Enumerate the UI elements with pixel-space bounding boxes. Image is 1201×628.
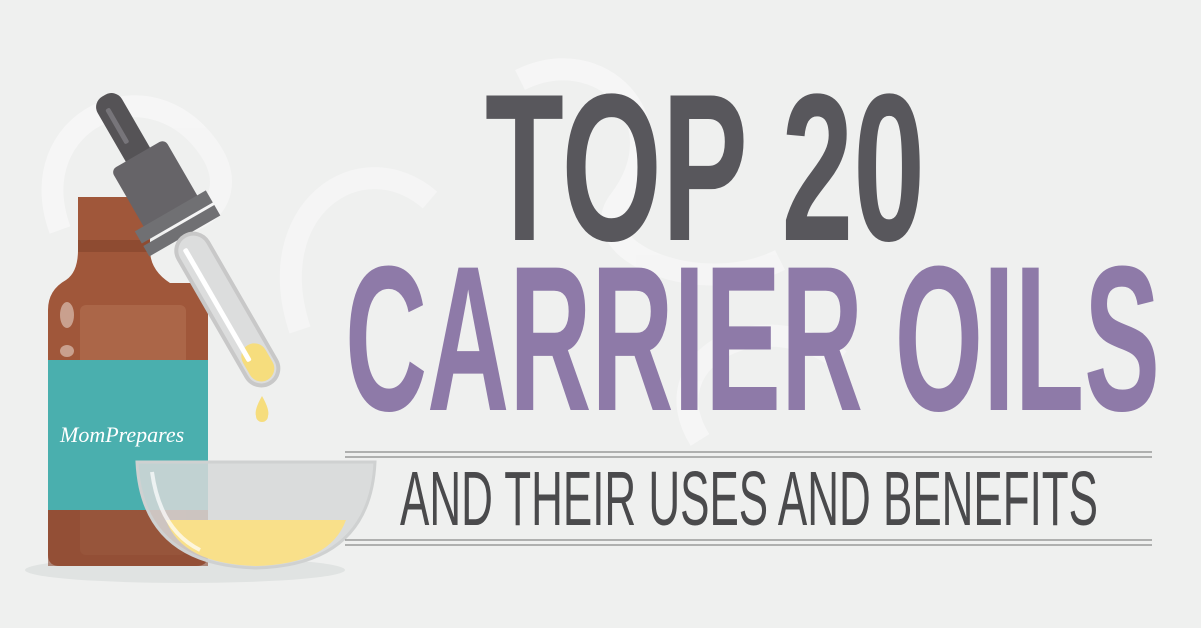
- divider lines top: [345, 452, 1152, 457]
- icon: dropper: [68, 75, 305, 404]
- icon: glass bowl with oil: [137, 462, 375, 568]
- bottle label: [48, 360, 208, 510]
- bottle label: MomPrepares: [59, 422, 184, 447]
- shadow under bottle and bowl: [25, 557, 345, 583]
- icon: brown bottle: [48, 197, 208, 566]
- divider lines bottom: [345, 540, 1152, 545]
- title: TOP 20: TOP 20: [485, 50, 925, 285]
- icon: oil drop: [256, 396, 268, 422]
- background swirls: [52, 69, 840, 440]
